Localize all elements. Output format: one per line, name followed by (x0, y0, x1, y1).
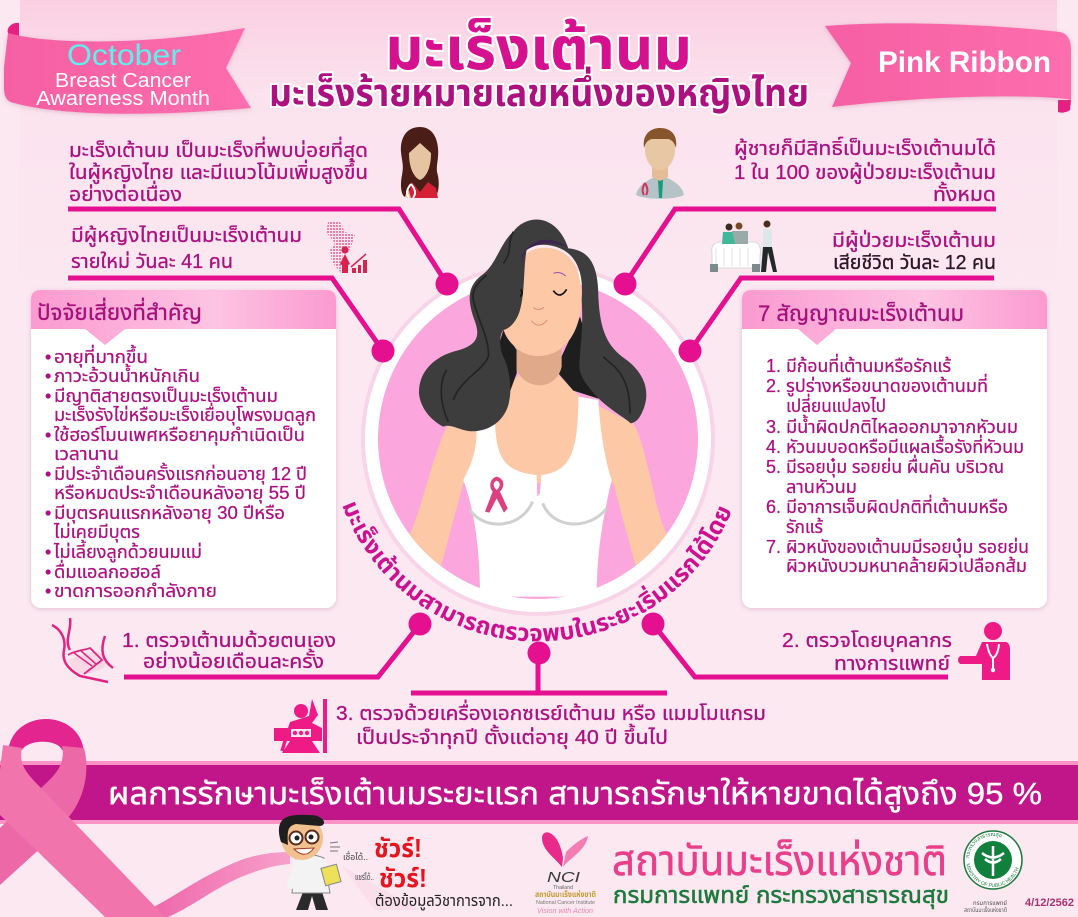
text: method 1 self exam (122, 629, 336, 673)
text: method 2 medical staff: ทางการแพทย์ (834, 653, 950, 675)
big ribbon (0, 719, 290, 917)
icon: doctor (958, 622, 1010, 680)
warning signs list: 6. (766, 497, 781, 517)
risk factor list: อายุที่มากขึ้น (54, 344, 148, 368)
text: 12 deaths per day: มีผู้ป่วยมะเร็งเต้านม (832, 229, 996, 253)
connector lines bottom (124, 624, 948, 693)
cartoon doctor (279, 815, 341, 910)
warning signs list: หัวนมบอดหรือมีแผลเรื้อรังที่หัวนม (786, 434, 1024, 457)
logo: ministry of public health seal: MINISTRY OF PUBLIC HEALTH (966, 864, 1019, 887)
icon: Thailand map with woman and chart (326, 222, 367, 273)
left banner: October Breast Cancer Awareness Month: October (67, 39, 181, 72)
logo: ministry of public health seal: กรมการแพทย์ (973, 901, 1007, 907)
text: method 3 mammogram (336, 699, 766, 749)
warning signs list: 3. (766, 417, 781, 437)
warning signs list: 7. (766, 537, 781, 557)
logo: NCI: National Cancer Institute (536, 900, 595, 906)
risk factor list: มีประจำเดือนครั้งแรกก่อนอายุ 12 ปี (54, 462, 307, 485)
warning signs list: มีอาการเจ็บผิดปกติที่เต้านมหรือ (786, 494, 1008, 517)
warning signs list: 4. (766, 437, 781, 457)
risk factor list: • (45, 542, 51, 562)
result band (0, 761, 1078, 824)
panel: 7 warning signs: 7 สัญญาณมะเร็งเต้านม (758, 301, 964, 326)
risk factor list: • (45, 503, 51, 523)
organisation name (612, 837, 949, 909)
logo: NCI: Thailand (553, 885, 573, 891)
text: breast cancer most common: อย่างต่อเนื่อง (69, 180, 182, 206)
risk factor list: • (45, 581, 51, 601)
warning signs list: ลานหัวนม (786, 477, 857, 497)
warning signs list: 1. (766, 356, 781, 376)
text: method 3 mammogram: เป็นประจำทุกปี ตั้งแต่อายุ 40 ปี ขึ้นไป (356, 723, 668, 749)
text: breast cancer most common: ในผู้หญิงไทย และมีแนวโน้มเพิ่มสูงขึ้น (69, 158, 368, 185)
icon: self examination hands (52, 618, 113, 682)
risk factor list: ภาวะอ้วนน้ำหนักเกิน (54, 363, 200, 386)
risk factor list: • (45, 562, 51, 582)
warning signs list (766, 353, 1029, 576)
risk factor list: ดื่มแอลกอฮอล์ (54, 559, 161, 582)
risk factor list: ไม่เลี้ยงลูกด้วยนมแม่ (53, 539, 202, 564)
logo: NCI: สถาบันมะเร็งแห่งชาติ (535, 888, 596, 899)
logo: ministry of public health seal (963, 830, 1023, 914)
risk factor list: ใช้ฮอร์โมนเพศหรือยาคุมกำเนิดเป็น (54, 425, 305, 446)
icon: man with ribbon (636, 128, 684, 199)
text: men can also get breast cancer: ทั้งหมด (933, 181, 996, 206)
speech: Sure sure: เชื่อได้.. (343, 850, 368, 862)
risk factor list: ขาดการออกกำลังกาย (54, 581, 217, 601)
risk factor list: • (45, 425, 51, 445)
panel: risk factors (31, 290, 336, 608)
risk factor list: • (45, 464, 51, 484)
warning signs list: 2. (766, 376, 781, 396)
text: breast cancer most common: มะเร็งเต้านม เป็นมะเร็งที่พบบ่อยที่สุด (69, 136, 368, 162)
connector lines top (68, 209, 996, 351)
text: method 2 medical staff: 2. ตรวจโดยบุคลากร (782, 630, 952, 652)
left banner: October Breast Cancer Awareness Month: Awareness Month (36, 88, 210, 110)
icon: patient with family and table (710, 220, 777, 272)
warning signs list: รักแร้ (786, 517, 823, 537)
text: 41 new cases per day (71, 224, 302, 273)
panel: risk factors: ปัจจัยเสี่ยงที่สำคัญ (37, 297, 202, 325)
text: breast cancer most common (69, 136, 368, 206)
logo: NCI: Vision with Action (537, 908, 593, 915)
logo: ministry of public health seal: กระทรวงสาธารณสุข (966, 832, 1002, 858)
text: men can also get breast cancer: ผู้ชายก็มีสิทธิ์เป็นมะเร็งเต้านมได้ (734, 136, 996, 161)
speech: Sure sure: แชร์ได้.. (355, 872, 374, 882)
icon: woman with ribbon (401, 127, 439, 198)
organisation name: กรมการแพทย์ กระทรวงสาธารณสุข (613, 882, 949, 909)
text: 12 deaths per day (832, 229, 996, 274)
logo: NCI: NCI (547, 869, 580, 886)
warning signs list: เปลี่ยนแปลงไป (786, 393, 886, 416)
logo: NCI (535, 832, 596, 915)
risk factor list: ไม่เคยมีบุตร (53, 522, 140, 543)
title: มะเร็งเต้านม (385, 15, 692, 82)
risk factor list: เวลานาน (54, 444, 119, 464)
warning signs list: ผิวหนังบวมหนาคล้ายผิวเปลือกส้ม (786, 556, 1027, 576)
text: men can also get breast cancer: 1 ใน 100 ของผู้ป่วยมะเร็งเต้านม (734, 161, 996, 185)
logo: ministry of public health seal: สถาบันมะเร็งแห่งชาติ (964, 907, 1007, 914)
risk factor list: มีญาติสายตรงเป็นมะเร็งเต้านม (54, 386, 278, 406)
warning signs list: มีน้ำผิดปกติไหลออกมาจากหัวนม (786, 414, 1018, 437)
title (269, 15, 809, 115)
speech: Sure sure: ชัวร์! (379, 863, 427, 893)
illustration: ring and pink circle (361, 262, 715, 616)
title: มะเร็งร้ายหมายเลขหนึ่งของหญิงไทย (269, 66, 809, 115)
text: method 1 self exam: 1. ตรวจเต้านมด้วยตนเอง (122, 629, 336, 652)
risk factor list: • (45, 347, 51, 367)
risk factor list: มะเร็งรังไข่หรือมะเร็งเยื่อบุโพรงมดลูก (54, 402, 316, 427)
right banner: Pink Ribbon: Pink Ribbon (878, 46, 1051, 79)
panel: 7 warning signs (742, 290, 1047, 608)
speech: Sure sure: ต้องข้อมูลวิชาการจาก... (375, 893, 513, 910)
text: 12 deaths per day: เสียชีวิต วันละ 12 คน (833, 252, 996, 274)
curved heading: มะเร็งเต้านมสามารถตรวจพบในระยะเริ่มแรกได้โดย (342, 502, 730, 642)
text: method 1 self exam: อย่างน้อยเดือนละครั้ง (143, 648, 324, 673)
warning signs list: มีรอยบุ๋ม รอยย่น ผื่นคัน บริเวณ (786, 454, 1004, 478)
warning signs list: รูปร่างหรือขนาดของเต้านมที่ (786, 373, 988, 398)
warning signs list: 5. (766, 457, 781, 477)
left banner: October Breast Cancer Awareness Month (4, 23, 251, 114)
date: 4/12/2562 (1025, 897, 1074, 909)
connector dots (372, 272, 702, 664)
risk factor list: • (45, 386, 51, 406)
text: 41 new cases per day: รายใหม่ วันละ 41 คน (71, 250, 233, 273)
text: method 2 medical staff (782, 630, 952, 675)
result band: ผลการรักษามะเร็งเต้านมระยะแรก สามารถรักษาให้หายขาดได้สูงถึง 95 % (108, 776, 1042, 812)
risk factor list: มีบุตรคนแรกหลังอายุ 30 ปีหรือ (54, 503, 285, 524)
icon: mammogram machine (274, 699, 327, 753)
risk factor list (45, 344, 316, 601)
left banner: October Breast Cancer Awareness Month: Breast Cancer (55, 70, 191, 92)
right banner: Pink Ribbon (825, 23, 1071, 113)
text: men can also get breast cancer (734, 136, 996, 206)
speech: Sure sure (342, 833, 513, 910)
organisation name: สถาบันมะเร็งแห่งชาติ (612, 837, 947, 884)
text: 41 new cases per day: มีผู้หญิงไทยเป็นมะเร็งเต้านม (71, 224, 302, 248)
warning signs list: มีก้อนที่เต้านมหรือรักแร้ (786, 353, 951, 376)
risk factor list: • (45, 366, 51, 386)
speech: Sure sure: ชัวร์! (374, 833, 422, 863)
text: method 3 mammogram: 3. ตรวจด้วยเครื่องเอกซเรย์เต้านม หรือ แมมโมแกรม (336, 699, 766, 725)
illustration: woman (408, 220, 668, 597)
risk factor list: หรือหมดประจำเดือนหลังอายุ 55 ปี (54, 483, 306, 504)
warning signs list: ผิวหนังของเต้านมมีรอยบุ๋ม รอยย่น (786, 537, 1029, 558)
